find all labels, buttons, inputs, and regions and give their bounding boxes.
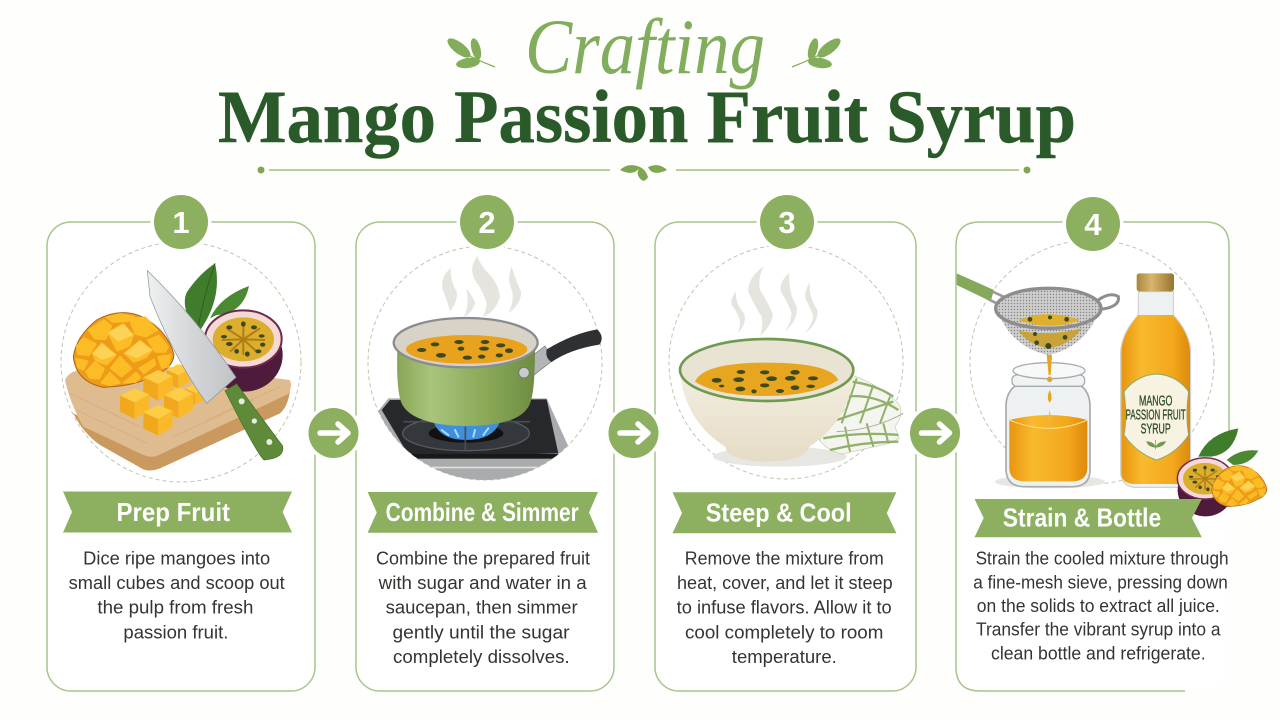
- step 4 description: Transfer the vibrant syrup into a: [976, 620, 1221, 640]
- panel: step 3 steep and cool: [655, 195, 916, 691]
- step 2 description: with sugar and water in a: [378, 573, 588, 593]
- arrow 2 to 3: [608, 408, 658, 458]
- illustration: bowl of syrup with checked towel: [680, 266, 903, 467]
- step 3 description: temperature.: [732, 647, 837, 667]
- step 2 description: gently until the sugar: [392, 622, 570, 642]
- card outline: [356, 222, 614, 691]
- ribbon: Combine & Simmer: [368, 492, 598, 533]
- panel: step 2 combine and simmer: [356, 195, 614, 691]
- ribbon: Strain & Bottle: [974, 499, 1202, 537]
- step 2 description: completely dissolves.: [393, 647, 570, 667]
- illustration: saucepan on gas burner: [375, 256, 602, 483]
- illustration: sieve, jar, bottle and fruit: [957, 273, 1267, 516]
- step 4 description: on the solids to extract all juice.: [977, 596, 1220, 616]
- dashed circle: [61, 242, 301, 482]
- ribbon: Combine & Simmer: Combine & Simmer: [386, 497, 579, 527]
- step number 3: [760, 195, 814, 249]
- heading: Mango Passion Fruit Syrup: Mango Passion Fruit Syrup: [218, 76, 1076, 159]
- step 4 description: [973, 549, 1229, 663]
- step 2 description: [376, 548, 590, 667]
- ribbon: Steep & Cool: [672, 492, 896, 533]
- ribbon: Prep Fruit: [63, 492, 292, 532]
- arrow 1 to 2: [308, 408, 358, 458]
- step number 2: [460, 195, 514, 249]
- step 1 description: passion fruit.: [123, 622, 228, 642]
- step 1 description: the pulp from fresh: [97, 598, 253, 618]
- title block: [218, 3, 1076, 181]
- ribbon: Strain & Bottle: Strain & Bottle: [1003, 503, 1161, 533]
- step 3 description: Remove the mixture from: [685, 548, 884, 568]
- step number 4: 4: [1084, 207, 1102, 242]
- step number 1: [154, 195, 208, 249]
- card outline: [47, 222, 315, 691]
- illustration: sieve, jar, bottle and fruit: SYRUP: [1141, 422, 1171, 438]
- step 3 description: cool completely to room: [685, 622, 883, 642]
- step number 4: [1066, 197, 1120, 251]
- card outline: [655, 222, 916, 691]
- step 3 description: [677, 548, 893, 667]
- title divider: [258, 165, 1030, 181]
- ribbon: Steep & Cool: Steep & Cool: [706, 498, 852, 528]
- card fill: [956, 222, 1229, 691]
- arrow 3 to 4: [910, 408, 960, 458]
- illustration: sieve, jar, bottle and fruit: MANGO: [1139, 393, 1172, 409]
- step number 2: 2: [478, 205, 496, 240]
- step 2 description: saucepan, then simmer: [386, 598, 578, 618]
- panel: step 1 prep fruit: [47, 195, 315, 691]
- illustration: mango, knife and passion fruit on board: [65, 263, 291, 470]
- step number 3: 3: [778, 205, 796, 240]
- dashed circle: [368, 246, 602, 480]
- step 1 description: small cubes and scoop out: [69, 573, 285, 593]
- step 2 description: Combine the prepared fruit: [376, 548, 590, 568]
- heading: Crafting: Crafting: [525, 3, 765, 90]
- dashed circle: [970, 240, 1214, 484]
- step 1 description: [69, 548, 285, 642]
- ribbon: Prep Fruit: Prep Fruit: [116, 497, 230, 527]
- step 3 description: to infuse flavors. Allow it to: [677, 598, 892, 618]
- step 3 description: heat, cover, and let it steep: [677, 573, 893, 593]
- step 1 description: Dice ripe mangoes into: [83, 548, 270, 568]
- step number 1: 1: [172, 205, 190, 240]
- step 4 description: a fine-mesh sieve, pressing down: [973, 572, 1228, 592]
- illustration: sieve, jar, bottle and fruit: PASSION FRUIT: [1126, 407, 1186, 423]
- step 4 description: Strain the cooled mixture through: [976, 549, 1229, 569]
- dashed circle: [669, 245, 903, 479]
- icon: left leaf sprig: [445, 35, 495, 70]
- step 4 description: clean bottle and refrigerate.: [991, 643, 1206, 663]
- panel: step 4 strain and bottle: [956, 197, 1267, 691]
- icon: right leaf sprig: [792, 35, 843, 70]
- card outline: [956, 222, 1229, 691]
